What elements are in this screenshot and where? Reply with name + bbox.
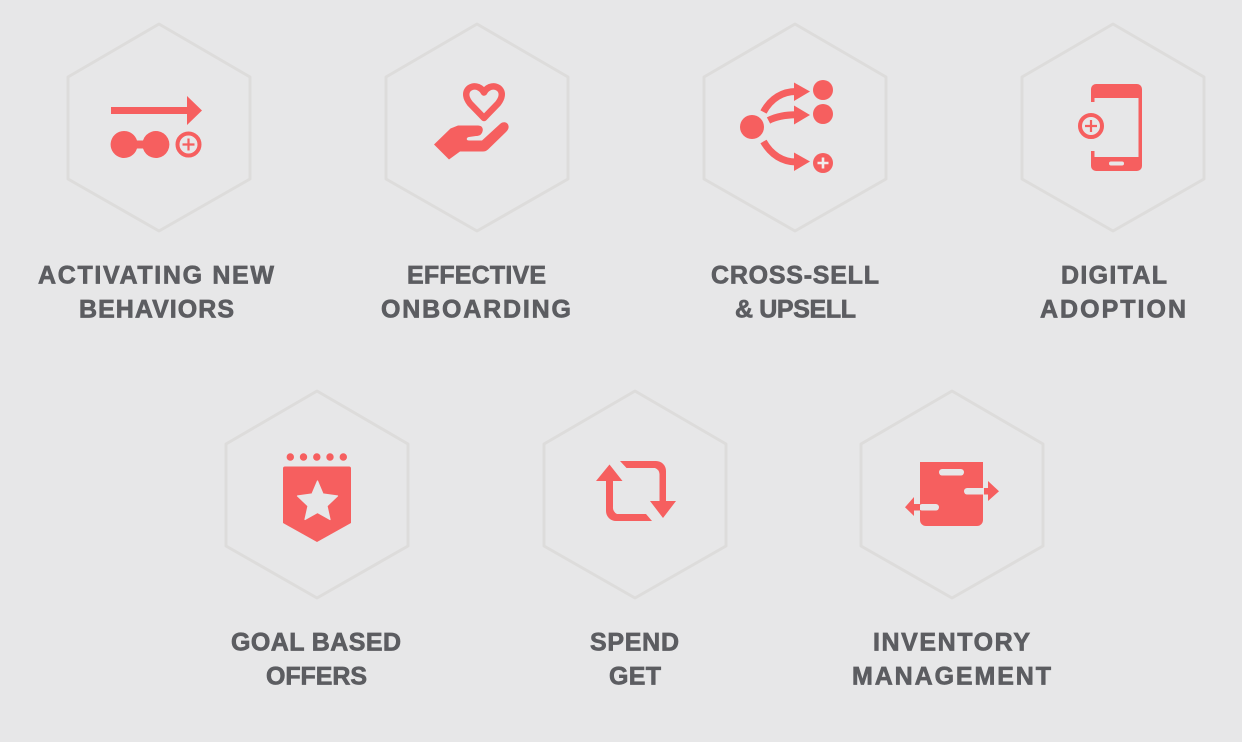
panel: spend get [544,391,726,690]
hexagon: spend get [544,391,726,598]
hexagon: cross-sell and upsell [704,24,886,231]
label: activating new behaviors: ACTIVATING NEW [38,262,274,290]
label: effective onboarding: ONBOARDING [381,296,571,324]
label: activating new behaviors [38,262,274,324]
icon: hand holding heart [434,86,509,160]
panel: inventory management [852,391,1051,690]
label: digital adoption: DIGITAL [1061,262,1167,290]
label: spend get: SPEND [590,628,679,656]
hexagon: activating new behaviors [68,24,250,231]
label: inventory management: MANAGEMENT [852,662,1051,690]
label: inventory management: INVENTORY [873,628,1030,656]
icon: branching arrows to circles [740,80,833,173]
panel: activating new behaviors [38,24,274,324]
label: spend get [590,628,679,690]
label: digital adoption: ADOPTION [1040,296,1186,324]
panel: cross-sell and upsell [704,24,886,324]
label: goal based offers [231,628,401,690]
icon: box with in and out arrows [905,462,999,526]
hexagon: digital adoption [1022,24,1204,231]
panel: effective onboarding [381,24,571,324]
label: goal based offers: GOAL BASED [231,628,401,656]
icon: shield badge with star [283,453,351,542]
label: cross-sell and upsell [711,262,879,324]
label: effective onboarding [381,262,571,324]
label: cross-sell and upsell: & UPSELL [735,296,856,324]
label: spend get: GET [609,662,661,690]
label: cross-sell and upsell: CROSS-SELL [711,262,879,290]
label: effective onboarding: EFFECTIVE [407,262,546,290]
hexagon: effective onboarding [386,24,568,231]
icon: phone with plus [1080,84,1142,171]
label: inventory management [852,628,1051,690]
label: activating new behaviors: BEHAVIORS [79,296,234,324]
panel: goal based offers [226,391,408,690]
label: goal based offers: OFFERS [266,662,367,690]
icon: repeat arrows [596,461,676,521]
panel: digital adoption [1022,24,1204,324]
hexagon: inventory management [861,391,1043,598]
hexagon: goal based offers [226,391,408,598]
icon: arrow with joined circles and plus [111,96,202,158]
label: digital adoption [1040,262,1186,324]
